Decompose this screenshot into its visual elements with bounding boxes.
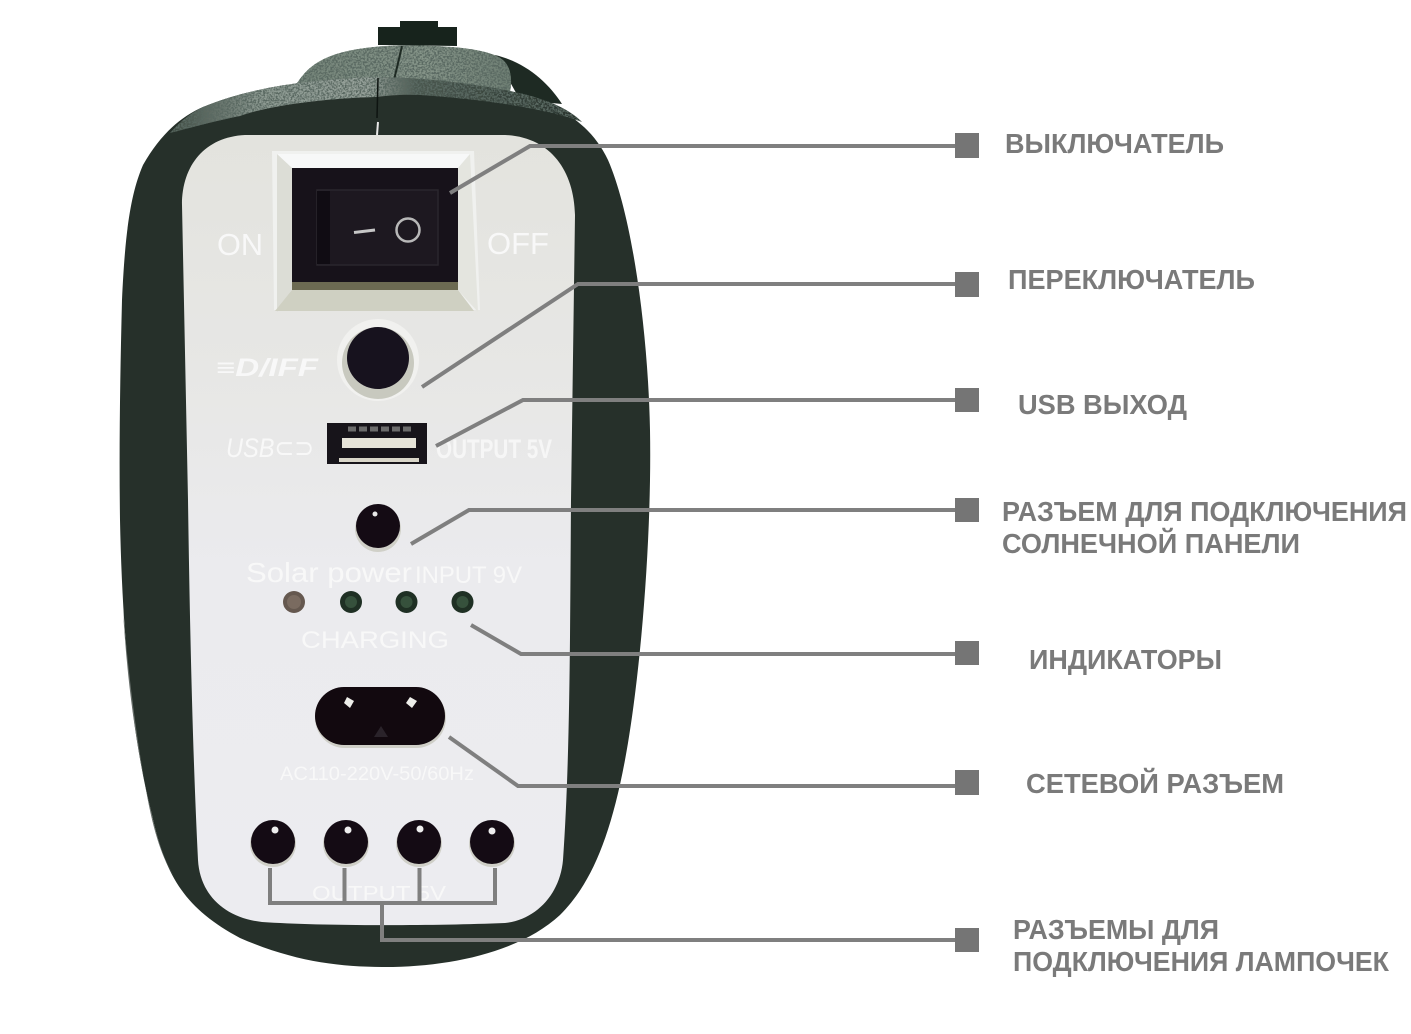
callout: USB output — [436, 388, 1187, 446]
callout: lamp sockets — [270, 868, 1390, 977]
callout: indicators: ИНДИКАТОРЫ — [1029, 644, 1222, 675]
callout: mode button — [422, 264, 1255, 387]
device illustration — [120, 21, 650, 967]
usb port — [327, 423, 427, 464]
push button — [337, 319, 419, 401]
AC socket — [315, 687, 446, 748]
top clip tab — [378, 21, 457, 46]
callout: USB output: USB ВЫХОД — [1018, 389, 1187, 420]
callout: power switch: ВЫКЛЮЧАТЕЛЬ — [1005, 128, 1224, 159]
embossed labels on panel: AC110-220V-50/60Hz — [280, 764, 474, 785]
callout: power switch — [450, 128, 1224, 193]
embossed labels on panel: ON — [217, 227, 263, 262]
embossed labels on panel: ≡D/IFF — [216, 354, 319, 382]
embossed labels on panel: USB⊂⊃ — [226, 433, 314, 463]
embossed labels on panel: Solar power — [246, 557, 412, 588]
embossed labels on panel: CHARGING — [301, 627, 449, 654]
embossed labels on panel — [216, 226, 552, 905]
front panel — [182, 135, 575, 925]
solar input jack — [355, 504, 401, 552]
callout: solar panel jack — [411, 496, 1407, 559]
callout: indicators — [471, 625, 1222, 675]
indicator LEDs — [283, 591, 474, 613]
device body — [120, 77, 650, 967]
lamp output jacks — [250, 820, 515, 867]
callout: mains socket — [449, 737, 1284, 799]
rocker switch — [272, 151, 480, 312]
callout: mains socket: СЕТЕВОЙ РАЗЪЕМ — [1026, 767, 1284, 799]
callout: lamp sockets: РАЗЪЕМЫ ДЛЯ — [1013, 914, 1219, 945]
embossed labels on panel: OUTPUT 5V — [312, 883, 447, 905]
handle — [296, 46, 562, 104]
embossed labels on panel: OUTPUT 5V — [436, 434, 552, 464]
callout: lamp sockets: ПОДКЛЮЧЕНИЯ ЛАМПОЧЕК — [1013, 946, 1390, 977]
embossed labels on panel: OFF — [487, 226, 549, 261]
callout: mode button: ПЕРЕКЛЮЧАТЕЛЬ — [1008, 264, 1255, 295]
callout: solar panel jack: РАЗЪЕМ ДЛЯ ПОДКЛЮЧЕНИЯ — [1002, 496, 1407, 527]
callout: solar panel jack: СОЛНЕЧНОЙ ПАНЕЛИ — [1002, 527, 1300, 559]
embossed labels on panel: INPUT 9V — [415, 562, 522, 589]
